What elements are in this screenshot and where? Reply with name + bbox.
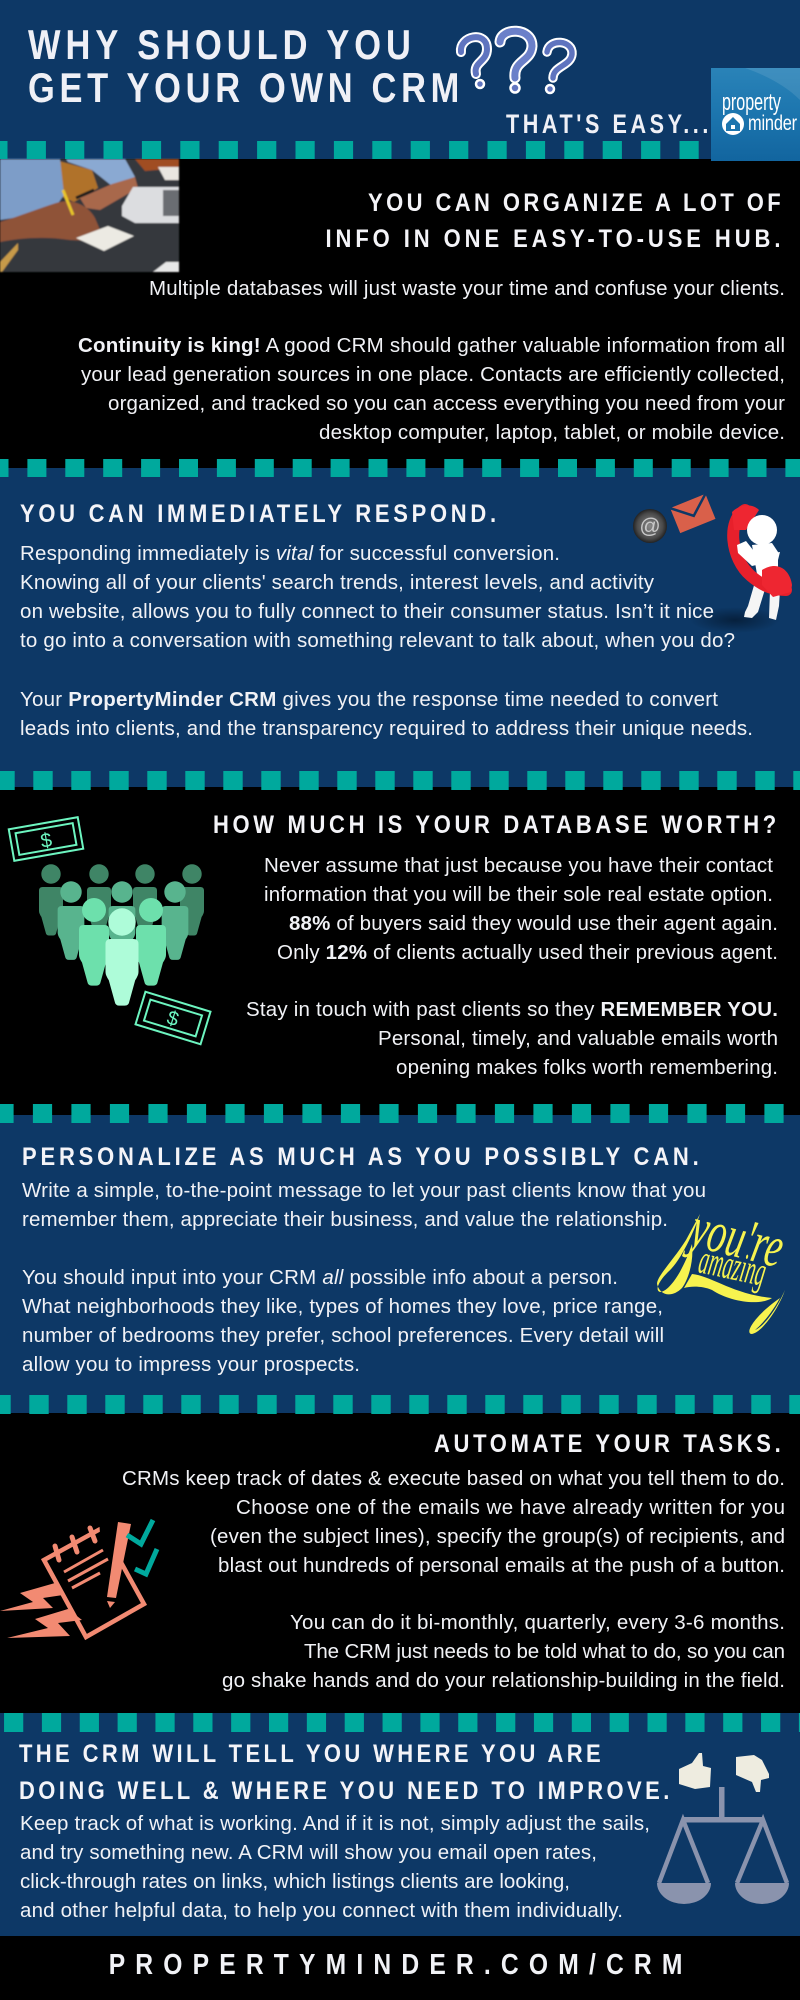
title: GET YOUR OWN CRM — [28, 65, 459, 112]
icon: at badge — [633, 509, 667, 543]
text block — [122, 1467, 785, 1692]
icon: notepad, pencil and lightning — [0, 1520, 157, 1638]
icon: question marks — [461, 31, 572, 93]
text block: You can do it bi-monthly, quarterly, every 3-6 months. — [290, 1611, 785, 1634]
icon: envelope — [670, 494, 715, 533]
heading: THE CRM WILL TELL YOU WHERE YOU ARE — [19, 1740, 601, 1767]
icon: you're amazing lettering — [657, 1193, 791, 1334]
text block — [246, 854, 778, 1079]
panel: respond — [0, 468, 800, 787]
text block: 88% of buyers said they would use their agent again. — [289, 912, 778, 935]
icon: thumbs up and down — [679, 1753, 769, 1792]
heading: AUTOMATE YOUR TASKS. — [434, 1430, 781, 1457]
heading: INFO IN ONE EASY-TO-USE HUB. — [326, 225, 780, 252]
text block: allow you to impress your prospects. — [22, 1353, 360, 1376]
footer — [0, 1936, 800, 2000]
title — [28, 22, 459, 112]
heading: DOING WELL & WHERE YOU NEED TO IMPROVE. — [19, 1777, 669, 1804]
heading: YOU CAN ORGANIZE A LOT OF — [368, 189, 781, 216]
panel: improve — [0, 1713, 800, 1936]
text block: Never assume that just because you have their contact — [264, 854, 773, 877]
icon: you're amazing lettering: amazing — [695, 1237, 770, 1296]
text block — [20, 542, 753, 740]
text block: organized, and tracked so you can access everything you need from your — [108, 392, 785, 415]
icon: at badge: @ — [639, 515, 661, 538]
icon: money bottom: $ — [164, 1007, 181, 1031]
text block: blast out hundreds of personal emails at the push of a button. — [218, 1554, 785, 1577]
panel: organize — [0, 159, 800, 468]
text block: Stay in touch with past clients so they REMEMBER YOU. — [246, 998, 778, 1021]
text block: (even the subject lines), specify the group(s) of recipients, and — [210, 1525, 785, 1548]
panel: database worth — [0, 787, 800, 1115]
text block: remember them, appreciate their business, and value the relationship. — [22, 1208, 668, 1231]
text block: and try something new. A CRM will show you email open rates, — [20, 1841, 597, 1864]
text block: Responding immediately is vital for successful conversion. — [20, 542, 560, 565]
text block: to go into a conversation with something relevant to talk about, when you do? — [20, 629, 735, 652]
text block: Only 12% of clients actually used their previous agent. — [277, 941, 778, 964]
icon: figure holding phone — [690, 505, 792, 633]
text block: number of bedrooms they prefer, school preferences. Every detail will — [22, 1324, 664, 1347]
panel: automate — [0, 1413, 800, 1713]
text block: your lead generation sources in one place. Contacts are efficiently collected, — [81, 363, 785, 386]
text block — [20, 1812, 650, 1922]
heading: HOW MUCH IS YOUR DATABASE WORTH? — [213, 811, 776, 838]
heading: YOU CAN IMMEDIATELY RESPOND. — [20, 500, 496, 527]
icon: money top — [9, 817, 83, 861]
text block: Personal, timely, and valuable emails worth — [378, 1027, 778, 1050]
text block: Knowing all of your clients' search trends, interest levels, and activity — [20, 571, 655, 594]
heading — [19, 1740, 669, 1804]
text block: click-through rates on links, which listings clients are looking, — [20, 1870, 570, 1893]
heading: PERSONALIZE AS MUCH AS YOU POSSIBLY CAN. — [22, 1143, 699, 1170]
icon: crowd of people — [39, 864, 204, 1006]
text block: information that you will be their sole real estate option. — [264, 883, 773, 906]
text block: Your PropertyMinder CRM gives you the response time needed to convert — [20, 688, 718, 711]
text block — [78, 277, 785, 444]
text block: on website, allows you to fully connect to their consumer status. Isn’t it nice — [20, 600, 714, 623]
text block: Multiple databases will just waste your time and confuse your clients. — [149, 277, 785, 300]
text block: Continuity is king! A good CRM should gather valuable information from all — [78, 334, 785, 357]
photo: hand writing at a desk — [0, 159, 179, 272]
text block: CRMs keep track of dates & execute based on what you tell them to do. — [122, 1467, 785, 1490]
heading — [326, 189, 781, 252]
text block: Write a simple, to-the-point message to let your past clients know that you — [22, 1179, 706, 1202]
panel: personalize — [0, 1115, 800, 1413]
text block: You should input into your CRM all possible info about a person. — [22, 1266, 618, 1289]
text block: Choose one of the emails we have already written for you — [236, 1496, 785, 1519]
text block: opening makes folks worth remembering. — [396, 1056, 778, 1079]
text block — [22, 1179, 706, 1376]
logo: propertyminder — [711, 68, 800, 161]
text block: Keep track of what is working. And if it is not, simply adjust the sails, — [20, 1812, 650, 1835]
text block: The CRM just needs to be told what to do, so you can — [304, 1640, 785, 1663]
text block: and other helpful data, to help you connect with them individually. — [20, 1899, 623, 1922]
footer: PROPERTYMINDER.COM/CRM — [109, 1948, 682, 1980]
icon: scales — [657, 1787, 789, 1904]
text block: desktop computer, laptop, tablet, or mobile device. — [319, 421, 785, 444]
tagline: THAT'S EASY... — [506, 110, 708, 140]
icon: you're amazing lettering: you're — [681, 1193, 791, 1280]
logo: propertyminder: minder — [748, 111, 797, 134]
title: WHY SHOULD YOU — [28, 22, 411, 69]
text block: What neighborhoods they like, types of homes they love, price range, — [22, 1295, 663, 1318]
text block: leads into clients, and the transparency required to address their unique needs. — [20, 717, 753, 740]
text block: go shake hands and do your relationship-building in the field. — [222, 1669, 785, 1692]
panel: header — [0, 0, 800, 159]
logo: propertyminder: property — [722, 90, 782, 116]
icon: money top: $ — [39, 829, 54, 853]
icon: money bottom — [136, 992, 210, 1044]
